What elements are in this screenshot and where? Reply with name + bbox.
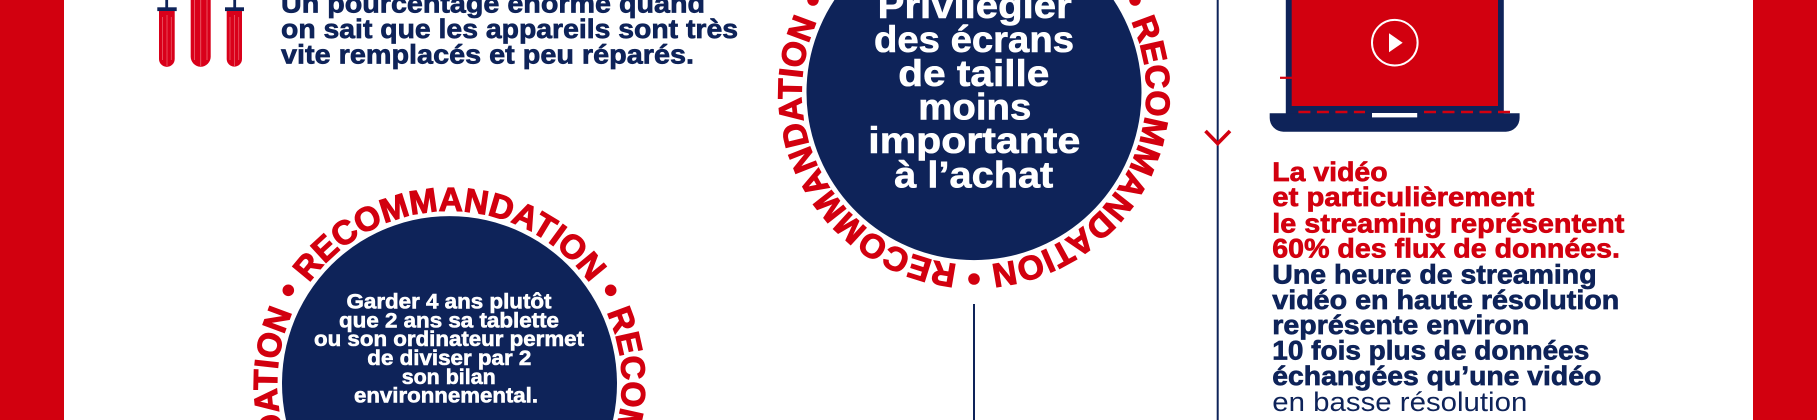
badge text: de diviser par 2 [367, 346, 531, 370]
circular heading [778, 0, 1170, 288]
connector line under middle badge [973, 304, 975, 420]
badge text: son bilan [402, 365, 496, 389]
text block: video streaming [1272, 157, 1624, 417]
text block: repair percentage: on sait que les appareils sont très [281, 14, 738, 44]
badge text: des écrans [874, 19, 1074, 60]
red statement: La vidéo [1272, 157, 1388, 187]
left red border [0, 0, 64, 420]
red statement [1272, 157, 1624, 264]
navy statement: 10 fois plus de données [1272, 335, 1589, 365]
badge text: Garder 4 ans plutôt [346, 289, 552, 313]
icon: laptop with video player [1270, 0, 1520, 132]
navy statement: échangées qu’une vidéo [1272, 361, 1601, 391]
badge text [868, 0, 1080, 196]
navy statement [1272, 259, 1619, 391]
light closing line: en basse résolution [1272, 387, 1527, 417]
circular heading: RECOMMANDATION [992, 14, 1170, 288]
badge text [314, 289, 584, 408]
circular heading [253, 187, 646, 420]
navy statement: Une heure de streaming [1272, 259, 1597, 289]
badge text: importante [868, 120, 1080, 161]
badge text: environnemental. [354, 384, 538, 408]
navy statement: représente environ [1272, 310, 1529, 340]
red statement: le streaming représentent [1272, 208, 1624, 238]
circular heading: RECOMMANDATION [778, 14, 956, 288]
icon: hanging test tubes [157, 0, 244, 67]
red statement: 60% des flux de données. [1272, 234, 1620, 264]
panel: recommendation badge, smaller screens [778, 0, 1170, 288]
circular heading: RECOMMANDATION [292, 187, 608, 282]
red statement: et particulièrement [1272, 182, 1534, 212]
badge disc [282, 216, 617, 420]
badge text: à l’achat [894, 154, 1053, 196]
navy statement: vidéo en haute résolution [1272, 285, 1619, 315]
badge text: que 2 ans sa tablette [339, 308, 559, 332]
right red border [1753, 0, 1817, 420]
panel: recommendation badge, keep devices longer [253, 187, 646, 420]
badge text: ou son ordinateur permet [314, 327, 584, 351]
badge text: moins [918, 86, 1031, 128]
text block: repair percentage: vite remplacés et peu réparés. [281, 39, 694, 69]
timeline arrow: vertical line with chevron [1206, 0, 1230, 420]
badge disc [807, 0, 1141, 260]
text block: repair percentage [281, 0, 738, 69]
badge text: de taille [898, 53, 1049, 94]
